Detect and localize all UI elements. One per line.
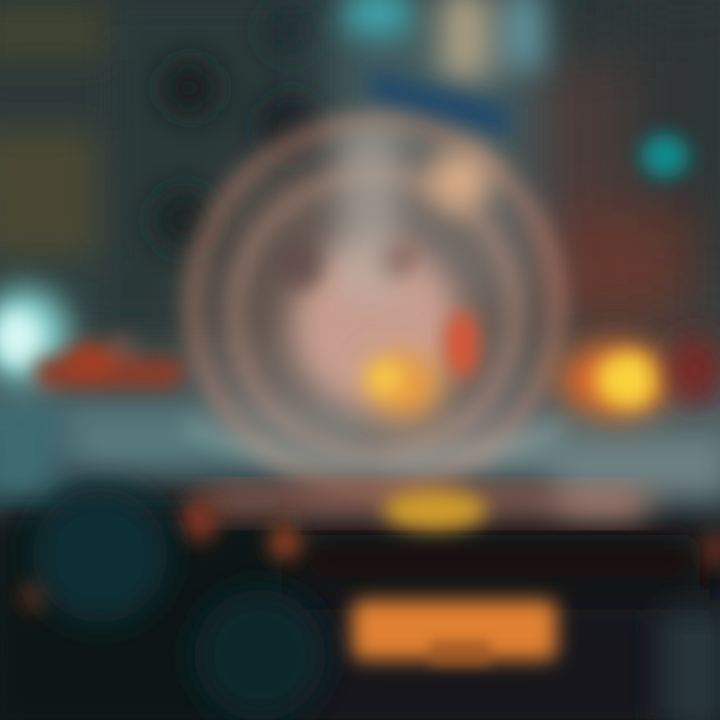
teal dark wheels <box>32 487 720 720</box>
orange streak above dark band <box>200 490 650 517</box>
right headlight <box>557 334 720 418</box>
orange spots <box>21 498 720 611</box>
peach lamp <box>428 150 492 210</box>
teal sign <box>641 134 689 178</box>
buildings centre and right <box>330 0 720 330</box>
central lights <box>367 311 478 417</box>
red car lights left <box>35 334 185 388</box>
road band <box>0 400 720 510</box>
pink circular rings <box>185 123 565 487</box>
foreground dark band <box>0 510 720 720</box>
buildings left <box>0 0 330 330</box>
yellow reflection <box>383 490 487 530</box>
glow: left cyan light <box>0 287 70 383</box>
orange glowing sign <box>352 600 557 666</box>
